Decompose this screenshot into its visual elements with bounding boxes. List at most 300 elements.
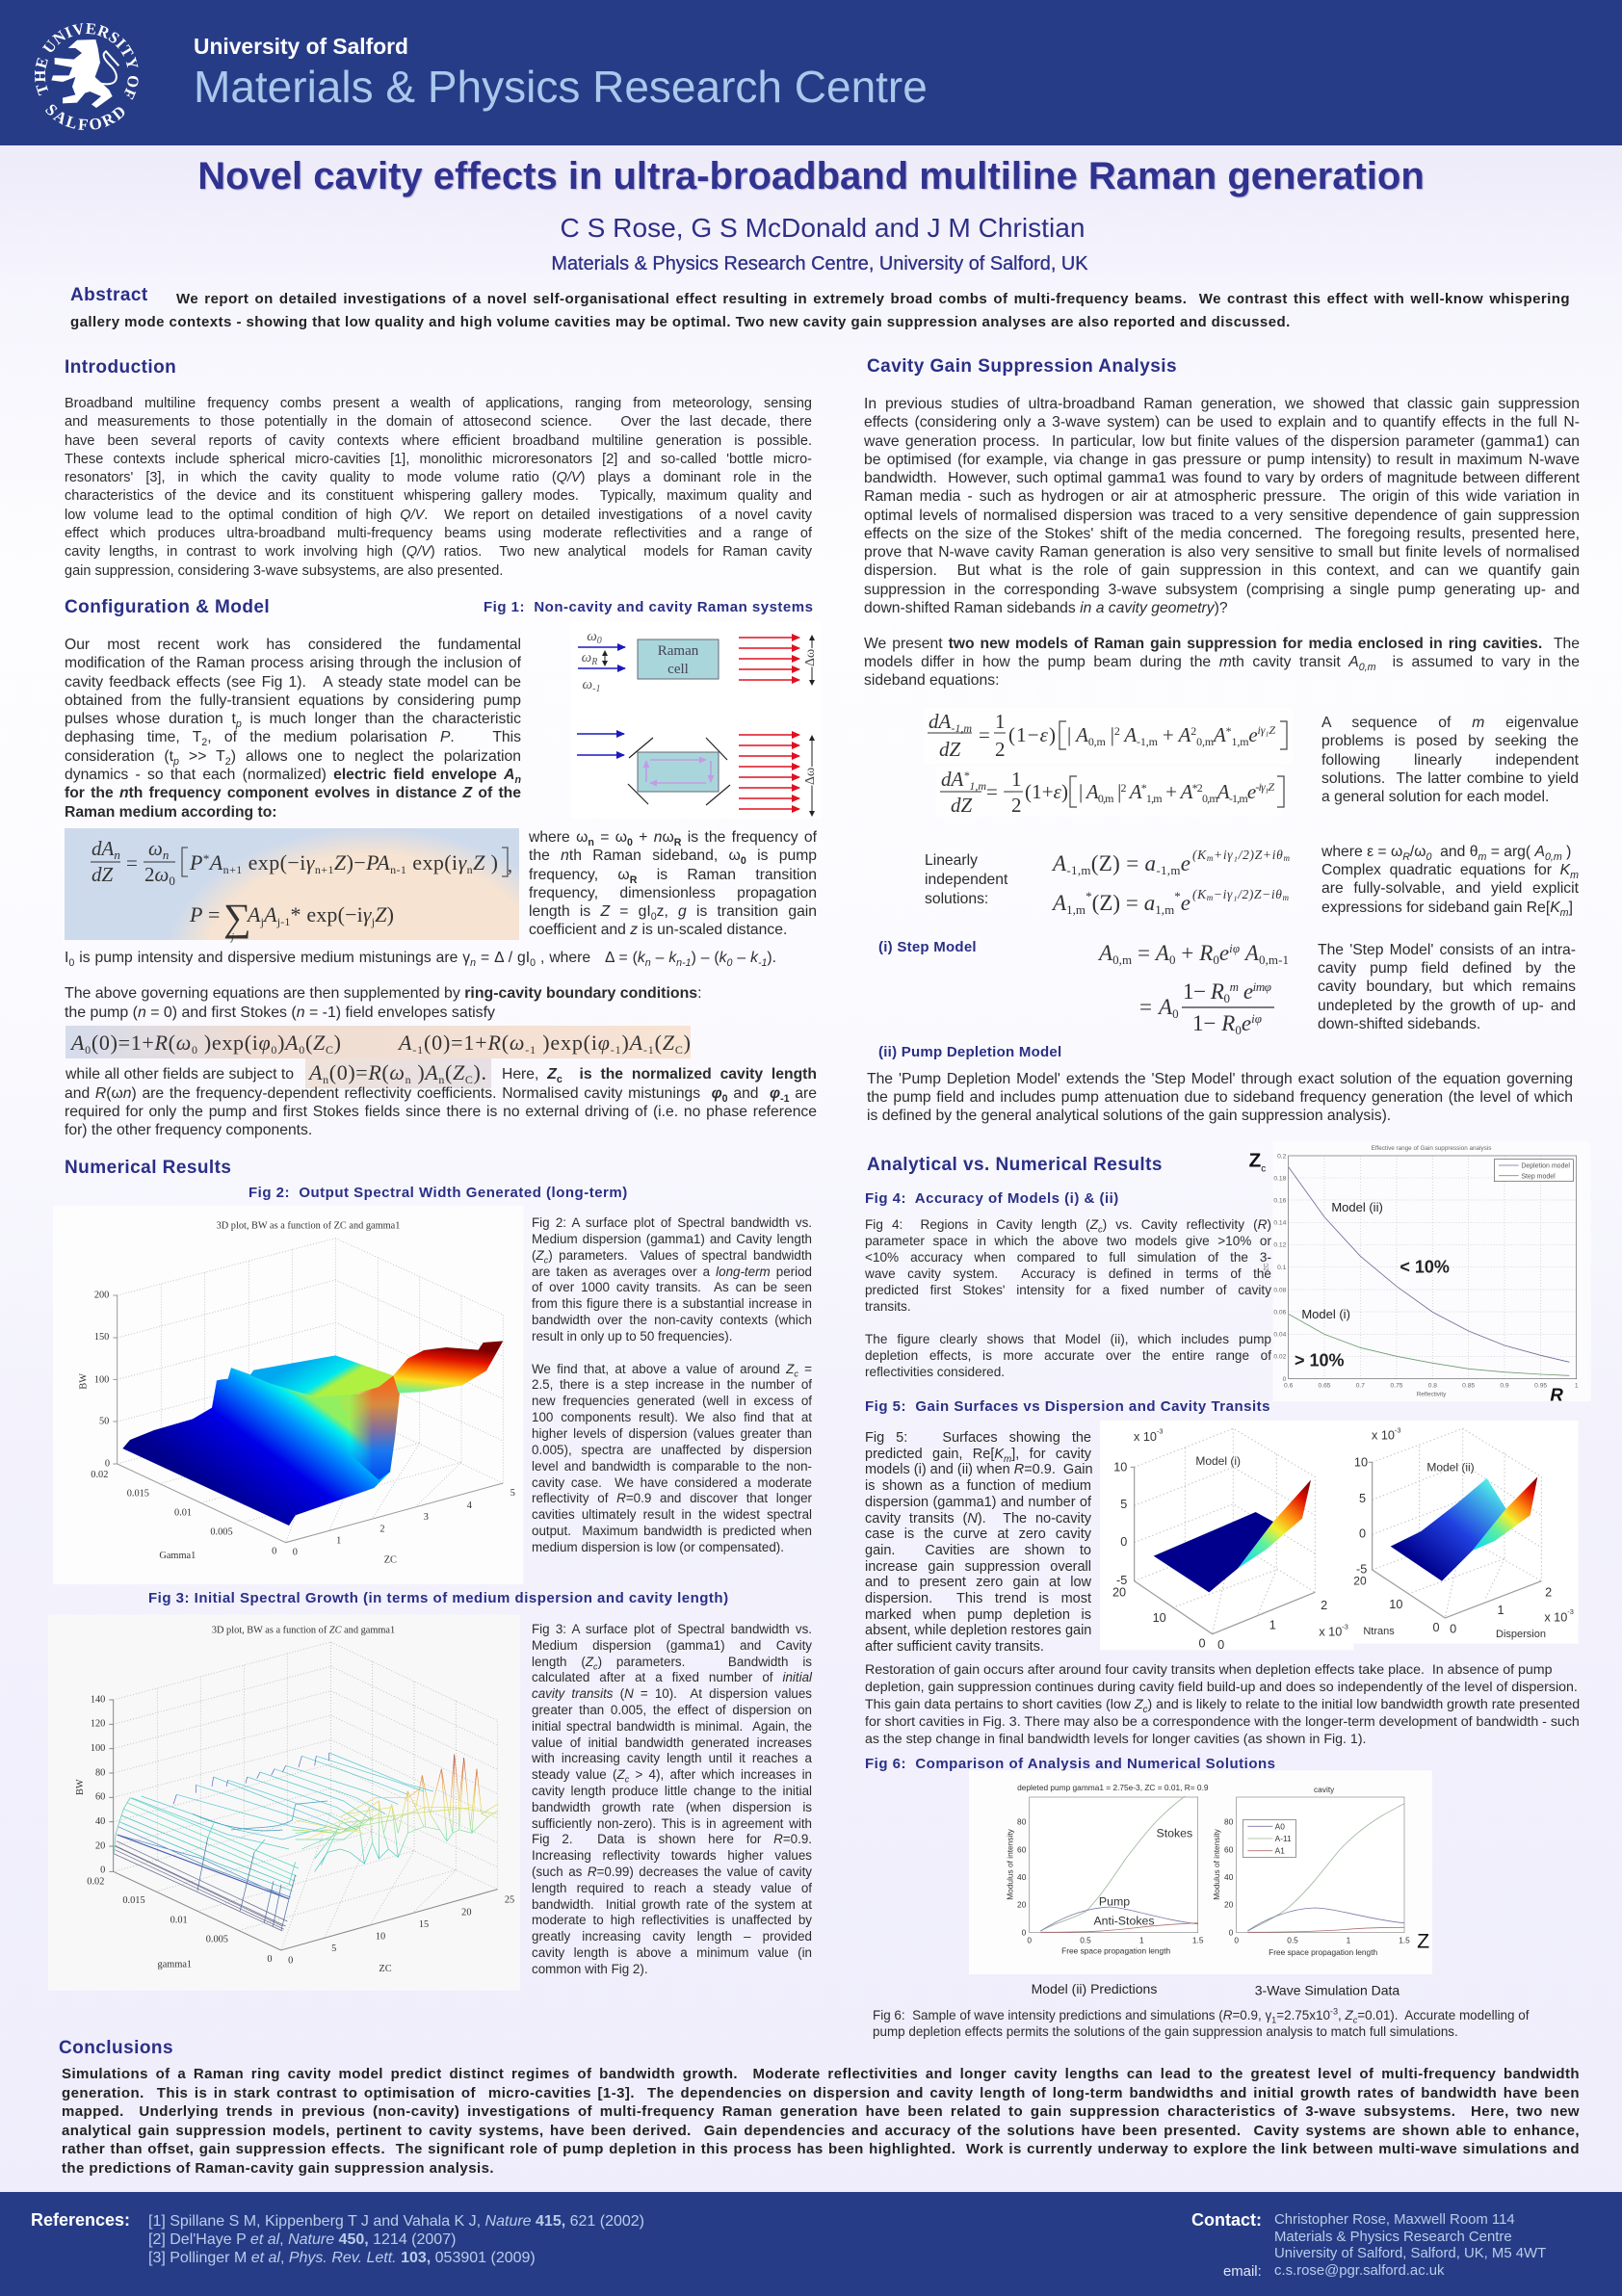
equation: step model: R <box>1198 941 1213 965</box>
equation: governing field equations: j <box>229 931 234 943</box>
text: figure 2 description: from this figure there is a substantial increase in <box>532 1296 812 1311</box>
text: figure 6 description: Fig 6: Sample of wave intensity predictions and simulations (R=0.9, γ1=2.75x10-3, Zc=0.01). Accurate modelling of <box>873 2007 1529 2025</box>
text: figure 2 description: Fig 2: A surface plot of Spectral bandwidth vs. <box>532 1215 812 1230</box>
heading: Configuration & Model: Configuration & Model <box>65 597 270 617</box>
surface plot: model (ii): 0 <box>1359 1527 1366 1541</box>
equation: linearly independent solutions: (K <box>1192 848 1206 862</box>
wireframe front sheets <box>114 1798 299 1931</box>
chart: figure 4 accuracy regions: 1 <box>1575 1382 1579 1389</box>
figure 2 axes <box>113 1295 503 1543</box>
text: restoration of gain: Restoration of gain occurs after around four cavity transits when depletion effects take place. In absence of pump <box>865 1662 1552 1678</box>
introduction text: gain suppression, considering 3-wave subsystems, are also presented. <box>65 563 503 579</box>
configuration text: for the nth frequency component evolves in distance Z of the <box>65 785 521 801</box>
equation: boundary conditions: C <box>326 1043 333 1057</box>
equation: sideband evolution: dA <box>941 768 963 791</box>
equation: sideband evolution: 1,m <box>1146 792 1163 805</box>
text: figure 4 description: predicted first Stokes' intensity for a fixed number of cavity <box>865 1283 1271 1297</box>
equation: linearly independent solutions: e <box>1181 891 1190 915</box>
upper non-cavity system: R <box>590 657 597 667</box>
text: figure 4 description: reflectivities considered. <box>865 1365 1005 1379</box>
chart: figure 2 surface plot <box>53 1221 523 1584</box>
curve: step model <box>1289 1314 1569 1375</box>
surface front <box>122 1368 401 1526</box>
plot: model (ii) predictions: 80 <box>1017 1817 1027 1827</box>
heading: Numerical Results: Numerical Results <box>65 1158 231 1178</box>
text: figure 4 description: parameter space in which the above two models give >10% or <box>865 1234 1271 1248</box>
text: left of inline equation: while all other fields are subject to <box>65 1066 294 1083</box>
equation: boundary conditions: n <box>406 1073 411 1086</box>
equation: boundary conditions: A <box>69 1031 85 1055</box>
surface plot: model (ii): 0 <box>1450 1622 1456 1635</box>
chart: figure 4 accuracy regions: 0.06 <box>1273 1309 1287 1316</box>
text: conclusions <box>62 2065 1580 2178</box>
equation: boundary conditions: -1 <box>412 1043 423 1057</box>
equation: sideband evolution: -1,m <box>1229 792 1248 805</box>
equation: sideband evolution: *2 <box>1192 781 1203 795</box>
introduction text: effect which produces ultra-broadband multi-frequency beams using moderate reflectivities and a range of <box>65 526 812 541</box>
equation: sideband evolution: 2 <box>1114 724 1120 738</box>
text: boundary conditions intro: The above governing equations are then supplemented by ring-cavity boundary conditions: <box>65 985 702 1002</box>
equation: step model: 1− R <box>1192 1011 1235 1035</box>
text: pump depletion description <box>867 1070 1573 1125</box>
equation: sideband evolution: (1+ε) <box>1025 780 1068 803</box>
equation: sideband evolution: * <box>1226 724 1232 738</box>
surface plot: model (i): 0 <box>1198 1637 1206 1651</box>
plot: 3-wave simulation data: A-11 <box>1275 1834 1292 1843</box>
text: figure 5 description: is shown as a function of medium <box>865 1478 1091 1494</box>
chart: figure 4 accuracy regions: 0.12 <box>1273 1242 1287 1249</box>
equation: boundary conditions: ) <box>277 1031 284 1055</box>
surface plot: model (ii): x 10 <box>1372 1429 1395 1443</box>
equation: governing field equations: )−PA <box>347 850 390 874</box>
plot: 3-wave simulation data: 40 <box>1224 1872 1234 1882</box>
text: restoration of gain: as the step change in final bandwidth levels for longer cavities (as shown in Fig. 1). <box>865 1732 1366 1747</box>
chart: figure 4 accuracy regions: 0.08 <box>1273 1287 1287 1293</box>
text: figure 2 description: of over 1000 cavity transits. As can be seen <box>532 1280 812 1294</box>
chart: figure 2 surface plot: 200 <box>94 1291 109 1301</box>
chart: figure 3 wireframe plot: 80 <box>95 1767 105 1778</box>
equation: governing field equations: γ <box>306 850 316 874</box>
equation: step model: 0 <box>1213 952 1219 967</box>
text: reflectivity and mistunings: and R(ωn) are the frequency-dependent reflectivity coefficients. Normalised cavity mistunings φ0 and φ-1 are <box>65 1085 817 1105</box>
equation: boundary conditions: 0 <box>85 1043 91 1057</box>
chart: figure 3 wireframe plot: gamma1 <box>158 1959 192 1970</box>
text: conclusions: analytical gain suppression models, pertinent to cavity systems, have been derived. Gain dependencies and accuracy of the solutions have been presented. Cavity systems are shown able to enhance, <box>62 2123 1580 2138</box>
text: pump intensity and mistunings: I0 is pump intensity and dispersive medium mistunings are γn = Δ / gI0 , where Δ = (kn – kn-1) – (k0 – k-1). <box>65 950 776 969</box>
configuration text: obtained from the fully-transient equations by considering pump <box>65 692 521 709</box>
introduction text: low volume lead to the optimal condition of high Q/V. We report on detailed investigations of a novel cavity <box>65 508 812 523</box>
equation: boundary conditions: (0)=1+ <box>92 1031 154 1055</box>
plot: 3-wave simulation data: 1.5 <box>1399 1935 1410 1944</box>
equation: governing field equations: n <box>467 863 473 876</box>
chart: figure 4 accuracy regions: 0.18 <box>1273 1175 1287 1182</box>
chart: figure 4 accuracy regions: 0.1 <box>1277 1265 1287 1271</box>
equation: step model: m <box>1230 979 1239 994</box>
figure 5 caption: Fig 5: Gain Surfaces vs Dispersion and Cavity Transits <box>865 1398 1270 1415</box>
equation: governing field equations: Z <box>334 850 347 874</box>
equation: step model: 0 <box>1235 1023 1242 1037</box>
text: eigenvalue problems: solutions. The latter combine to yield <box>1321 770 1579 787</box>
equation: sideband evolution: | <box>1106 723 1114 746</box>
surface plot: model (ii): Dispersion <box>1496 1629 1546 1640</box>
equation: step model <box>1097 941 1289 1037</box>
chart: figure 5 gain surfaces <box>1079 1416 1599 1666</box>
text: figure 5 description <box>865 1430 1091 1656</box>
text: figure 2 description: higher levels of dispersion (values greater than <box>532 1426 812 1441</box>
plot: model (ii) predictions: 0.5 <box>1080 1935 1091 1944</box>
plot: 3-wave simulation data: Z <box>1417 1930 1429 1953</box>
equation: governing field equations: n+1 <box>223 863 242 876</box>
surface plot: model (ii): 2 <box>1545 1585 1552 1599</box>
equation: sideband evolution: + <box>1158 723 1179 746</box>
text: conclusions: generation. This is in stark contrast to optimisation of micro-cavities [1-3]. The dependencies on dispersion and cavity length of long-term bandwidths and initial growth rates of bandwidth have been <box>62 2084 1580 2101</box>
equation: step model: A <box>1240 941 1260 965</box>
text: figure 5 description: case is the curve at zero cavity <box>865 1526 1091 1542</box>
references list: [3] Pollinger M et al, Phys. Rev. Lett. 103, 053901 (2009) <box>148 2250 536 2266</box>
surface plot: model (i): x 10 <box>1319 1626 1342 1639</box>
equation: sideband evolution: 2 <box>1190 724 1196 738</box>
heading: Introduction: Introduction <box>65 357 176 378</box>
equation: boundary conditions: Z <box>453 1060 465 1084</box>
chart: figure 3 wireframe plot: 120 <box>91 1719 105 1730</box>
surface plot: model (ii): Model (ii) <box>1426 1461 1475 1474</box>
equation: boundary conditions: ( <box>445 1060 452 1084</box>
text: linearly independent solutions label: solutions: <box>925 891 988 907</box>
surface plot: model (i): 10 <box>1113 1460 1127 1474</box>
text: step model description: undepleted by the growth of up- and <box>1318 998 1576 1014</box>
configuration text: modification of the Raman process arising through the inclusion of <box>65 655 521 671</box>
text: pump depletion description: the pump field and includes pump attenuation due to sideband frequency generation (the level of which <box>867 1089 1573 1106</box>
plot: 3-wave simulation data: 0.5 <box>1287 1935 1298 1944</box>
text: figure 2 description: level and bandwidth is comparable to the non- <box>532 1459 812 1474</box>
plot: model (ii) predictions: 1 <box>1139 1935 1144 1944</box>
icon: University of Salford crest <box>35 23 139 130</box>
upper non-cavity system: -1 <box>592 684 600 694</box>
equation: linearly independent solutions: e <box>1181 851 1190 875</box>
figure 3 axes <box>109 1700 498 1950</box>
equation: sideband evolution: (1−ε) <box>1008 723 1056 746</box>
text: figure 4 description: <10% accuracy when compared to full simulation of the 3- <box>865 1250 1271 1265</box>
equation: boundary conditions: A <box>283 1031 299 1055</box>
text: figure 5 description: models (i) and (ii) when R=0.9. Gain <box>865 1462 1093 1477</box>
text: figure 5 description: absent, while depletion restores gain <box>865 1623 1091 1638</box>
text: figure 2 description: reflectivity of R=0.9 and discover that longer <box>532 1491 812 1505</box>
equation: governing field equations <box>91 837 512 943</box>
surface plot: model (i): -3 <box>1157 1427 1163 1436</box>
text: figure 3 description: calculated after at a fixed number of initial <box>532 1670 812 1684</box>
text: where epsilon: Complex quadratic equations for Km <box>1321 862 1579 881</box>
equation: governing field equations: n <box>114 848 120 862</box>
equation: governing field equations: * <box>203 851 209 866</box>
equation: step model: A <box>1097 941 1113 965</box>
text: figure 3 description: Medium dispersion (gamma1) and Cavity <box>532 1638 812 1653</box>
plot: 3-wave simulation data: 60 <box>1224 1844 1234 1854</box>
plot: 3-wave simulation data <box>1212 1785 1429 1998</box>
surface plot: model (ii): -5 <box>1356 1562 1367 1576</box>
equation: sideband evolution <box>928 710 1291 1037</box>
text: conclusions: mapped. Underlying trends in previous (non-cavity) investigations of multi-frequency Raman generation have been related to gain suppression characteristics of 3-wave subsystems. Here, two new <box>62 2103 1580 2120</box>
equation: governing field equations: 0 <box>169 874 175 888</box>
plot: model (ii) predictions: depleted pump gamma1 = 2.75e-3, ZC = 0.01, R= 0.9 <box>1017 1783 1209 1792</box>
equation: sideband evolution: e <box>1248 723 1258 746</box>
equation: sideband evolution: A <box>1177 723 1191 746</box>
text: figure 3 description: bandwidth growth rate (when dispersion is <box>532 1800 812 1814</box>
equation: linearly independent solutions: * <box>1086 889 1092 903</box>
plot: 3-wave simulation data: Modulus of intensity <box>1212 1828 1221 1900</box>
equation: sideband evolution: 0,m <box>1196 735 1215 748</box>
chart: figure 4 accuracy regions: ZC <box>1263 1263 1269 1271</box>
references list: [2] Del'Haye P et al, Nature 450, 1214 (2007) <box>148 2231 456 2248</box>
equation: governing field equations: n+1 <box>315 863 333 876</box>
chart: figure 4 accuracy regions: 0.02 <box>1273 1354 1287 1361</box>
authors: C S Rose, G S McDonald and J M Christian <box>561 213 1085 243</box>
poster title: Novel cavity effects in ultra-broadband multiline Raman generation <box>197 155 1425 197</box>
chart: figure 2 surface plot: 0 <box>293 1548 298 1558</box>
equation: boundary conditions: 0 <box>299 1043 304 1057</box>
introduction text: cavity lengths, in contrast to work involving high (Q/V) ratios. Two new analytical models for Raman cavity <box>65 544 812 560</box>
text: cavity gain suppression background: bandwidth. However, such optimal gamma1 was found to vary by orders of magnitude between different <box>864 470 1580 486</box>
equation: sideband evolution: A <box>1126 780 1142 803</box>
equation: linearly independent solutions: m <box>1207 893 1214 902</box>
chart: figure 4 accuracy regions: Reflectivity <box>1417 1391 1447 1397</box>
text: figure 3 description: length (Zc) parameters. Bandwidth is <box>532 1655 812 1671</box>
text: figure 3 description: Fig 2. Data is shown here for R=0.9. <box>532 1832 812 1846</box>
surface yellow transition band <box>337 1387 379 1422</box>
equation: boundary conditions: (0)=1+ <box>424 1031 487 1055</box>
equation: governing field equations: A <box>262 902 277 926</box>
chart annotations: < 10% <box>1400 1257 1450 1276</box>
text: cavity gain suppression background: effects on the size of the Stokes' shift of the media concerned. The foregoing results, presented here, <box>864 526 1580 542</box>
heading: Conclusions: Conclusions <box>59 2038 173 2058</box>
equation: boundary conditions: A <box>423 1060 438 1084</box>
surface plot: model (ii): 10 <box>1354 1456 1368 1470</box>
equation: governing field equations: = <box>126 851 138 874</box>
equation: step model: 0,m-1 <box>1259 952 1289 967</box>
abstract text <box>70 291 1570 330</box>
equation: governing field equations: dA <box>92 837 114 860</box>
equation: sideband evolution: A <box>1212 723 1226 746</box>
chart: figure 2 surface plot: 0 <box>105 1458 110 1469</box>
text: boundary conditions intro <box>65 985 702 1021</box>
plot: model (ii) predictions: Modulus of intensity <box>1005 1828 1014 1900</box>
chart: figure 2 surface plot: 0.005 <box>210 1526 233 1537</box>
research centre name: Materials & Physics Research Centre <box>194 62 928 112</box>
plot: model (ii) predictions: Free space propagation length <box>1061 1946 1171 1956</box>
plot: model (ii) predictions: 20 <box>1017 1900 1027 1910</box>
text: figure 2 description: cavities ultimately result in the widest spectral <box>532 1507 812 1522</box>
upper non-cavity system: ω <box>582 650 591 665</box>
text: linearly independent solutions label: Linearly <box>925 852 978 869</box>
equation: boundary conditions: R(ω <box>155 1031 191 1055</box>
text: figure 5 description: cavity transits (N). The no-cavity <box>865 1511 1091 1526</box>
text: figure 2 description: 2.5, there is a step increase in the number of <box>532 1377 812 1392</box>
chart: figure 2 surface plot: 0 <box>272 1547 276 1557</box>
text: linearly independent solutions label: independent <box>925 872 1007 888</box>
text: figure 5 description: and to present zero gain at low <box>865 1575 1091 1590</box>
chart: figure 4 accuracy regions: 0.16 <box>1273 1197 1287 1204</box>
text: linearly independent solutions label <box>925 852 1007 907</box>
abstract <box>70 285 1570 330</box>
chart: figure 3 wireframe plot: 3D plot, BW as a function of ZC and gamma1 <box>212 1625 395 1635</box>
plot: model (ii) predictions: Pump <box>1099 1894 1130 1908</box>
references list: [1] Spillane S M, Kippenberg T J and Vahala K J, Nature 415, 621 (2002) <box>148 2213 644 2230</box>
surface plateau <box>231 1355 393 1397</box>
surface plot: model (i): 20 <box>1112 1585 1126 1599</box>
introduction text: These contexts include spherical micro-cavities [1], monolithic microresonators [2] and so-called 'bottle micro- <box>65 452 812 467</box>
surface step wall <box>352 1375 400 1479</box>
text: figure 2 description: Medium dispersion (gamma1) and Cavity length <box>532 1232 812 1246</box>
text: where epsilon: expressions for sideband gain Re[Km] <box>1321 900 1573 919</box>
heading: Cavity Gain Suppression Analysis: Cavity Gain Suppression Analysis <box>867 356 1177 377</box>
text: step model description: The 'Step Model' consists of an intra- <box>1318 942 1576 958</box>
text: conclusions: rather than offset, gain suppression effects. The significant role of pump depletion in this process has been highlighted. Work is currently underway to explore the link between multi-wave simulations and <box>62 2141 1580 2157</box>
chart: figure 4 accuracy regions: 0 <box>1283 1376 1287 1383</box>
surface plot: model (i): 2 <box>1321 1599 1327 1612</box>
lower ring-cavity system <box>577 734 818 816</box>
text: step model description <box>1318 941 1576 1033</box>
equation: sideband evolution: dZ <box>951 794 973 817</box>
text: cavity gain suppression background: dispersion. But what is the role of gain suppression in this context, and can we quantify gain <box>864 562 1580 579</box>
surface plot: model (i) <box>1112 1427 1348 1652</box>
surface plot: model (i): x 10 <box>1134 1430 1157 1444</box>
text: figure 3 description: Increasing reflectivity towards higher values <box>532 1848 812 1863</box>
chart: figure 6 intensity plots <box>944 1762 1464 2013</box>
plot: model (ii) predictions: 0 <box>1022 1927 1027 1937</box>
chart: figure 4 accuracy regions: 0.75 <box>1391 1382 1403 1389</box>
introduction text: Broadband multiline frequency combs present a wealth of applications, ranging from meteorology, sensing <box>65 396 812 411</box>
icon: University of Salford crest: THE UNIVERSITY OF <box>35 23 139 100</box>
equation: governing field equations: P = <box>189 902 220 926</box>
text: definitions beside equations: where ωn = ω0 + nωR is the frequency of <box>529 829 817 848</box>
chart: figure 4 accuracy regions: 0.8 <box>1428 1382 1437 1389</box>
text: figure 3 description: moderate to high reflectivities is unaffected by <box>532 1913 812 1927</box>
equation: governing field equations: γ <box>363 902 373 926</box>
surface plot: model (i): -3 <box>1342 1622 1348 1631</box>
equation: boundary conditions: ) <box>684 1031 691 1055</box>
text: figure 5 description: after sufficient cavity transits. <box>865 1639 1044 1655</box>
legend: Step model <box>1521 1173 1556 1180</box>
equation: boundary conditions: n <box>438 1073 444 1086</box>
chart: figure 3 wireframe plot: 20 <box>461 1908 471 1918</box>
chart: figure 3 wireframe plot: 25 <box>505 1895 514 1906</box>
equation: sideband evolution: | <box>1113 780 1121 803</box>
equation: step model: = <box>1139 995 1152 1019</box>
text: cavity gain suppression background: In previous studies of ultra-broadband Raman generation, we showed that classic gain suppression <box>864 396 1580 412</box>
text: definitions beside equations: the nth Raman sideband, ω0 is pump <box>529 848 817 867</box>
text: figure 3 description: cavity transits (N = 10). At dispersion values <box>532 1686 812 1701</box>
equation: boundary conditions: -1 <box>643 1043 654 1057</box>
text: figure 2 description: are taken as averages over a long-term period <box>532 1265 812 1279</box>
surface plot: model (i): 5 <box>1120 1498 1127 1511</box>
text: cavity gain suppression background: suppression in the corresponding 3-wave subsystem (comprising a single pump generating up- and <box>864 582 1580 597</box>
introduction text: resonators' [3], in which the cavity quality to mode volume ratio (Q/V) plays a dominant role in the <box>65 470 812 485</box>
text: figure 2 description: output. Maximum bandwidth is predicted when <box>532 1524 812 1538</box>
text: figure 2 description: We find that, at above a value of around Zc = <box>532 1362 812 1378</box>
text: figure 5 description: Fig 5: Surfaces showing the <box>865 1430 1091 1446</box>
chart: figure 2 surface plot: 1 <box>336 1536 341 1547</box>
plot: 3-wave simulation data: cavity <box>1314 1785 1335 1794</box>
equation: sideband evolution: e <box>1247 780 1256 803</box>
upper non-cavity system: cell <box>667 662 689 677</box>
equation: boundary conditions: Z <box>663 1031 675 1055</box>
chart: figure 2 surface plot: 3 <box>424 1512 429 1523</box>
plot: 3-wave simulation data: 20 <box>1224 1900 1234 1910</box>
lower ring-cavity system: Δω <box>803 768 818 785</box>
surface plot: model (i): 10 <box>1153 1611 1166 1625</box>
plot: model (ii) predictions: Model (ii) Predictions <box>1032 1981 1157 1996</box>
contact details: c.s.rose@pgr.salford.ac.uk <box>1274 2263 1445 2279</box>
equation: boundary conditions: φ <box>259 1031 271 1055</box>
surface plot: model (ii): Ntrans <box>1363 1626 1395 1637</box>
equation: governing field equations: A <box>208 850 223 874</box>
configuration text: dephasing time, T2, of the medium polarisation P. This <box>65 729 521 749</box>
equation: linearly independent solutions: A <box>1051 891 1067 915</box>
text: eigenvalue problems: problems is posed by seeking the <box>1321 733 1579 749</box>
chart: figure 4 accuracy regions: 0.7 <box>1356 1382 1365 1389</box>
equation: step model: iφ <box>1251 1011 1262 1026</box>
text: figure 3 description: cavity length is above a minimum value (in <box>532 1945 812 1960</box>
configuration text: Raman medium according to: <box>65 804 277 821</box>
text: eigenvalue problems <box>1321 715 1579 805</box>
text: definitions beside equations <box>529 829 817 938</box>
references list <box>148 2213 644 2267</box>
upper non-cavity system: ω <box>583 677 592 692</box>
chart: figure 4 accuracy regions: 0.85 <box>1462 1382 1475 1389</box>
equation: boundary conditions: A <box>307 1060 323 1084</box>
text: figure 4 description <box>865 1216 1271 1380</box>
plot: model (ii) predictions: 0 <box>1027 1935 1032 1944</box>
equation: sideband evolution: + <box>1162 780 1181 803</box>
equation: governing field equations: n-1 <box>390 863 406 876</box>
text: restoration of gain: This gain data pertains to short cavities (low Zc) and is likely to relate to the initial low bandwidth growth rate presented <box>865 1697 1580 1715</box>
equation: step model: e <box>1239 979 1253 1004</box>
plot: 3-wave simulation data: 80 <box>1224 1817 1234 1827</box>
plot: 3-wave simulation data: 0 <box>1234 1935 1239 1944</box>
plot: 3-wave simulation data: 3-Wave Simulation Data <box>1255 1983 1400 1998</box>
upper non-cavity system: Δω <box>803 649 818 666</box>
equation: boundary conditions: A <box>628 1031 643 1055</box>
equation: sideband evolution: 0,m <box>1202 792 1218 805</box>
chart: figure 4 accuracy regions: 0.9 <box>1500 1382 1509 1389</box>
text: cavity gain suppression background <box>864 396 1580 616</box>
text: where epsilon: are fully-solvable, and yield explicit <box>1321 880 1579 897</box>
equation: boundary conditions: 0 <box>271 1043 276 1057</box>
text: figure 2 description: new frequencies generated (well in excess of <box>532 1394 812 1408</box>
equation: sideband evolution: 2 <box>1120 781 1126 795</box>
chart: figure 2 surface plot: ZC <box>384 1555 397 1566</box>
chart: figure 2 surface plot: Gamma1 <box>159 1551 196 1561</box>
text: definitions beside equations: frequency, ωR is Raman transition <box>529 867 817 886</box>
text: cavity gain suppression background: wave generation process. In particular, low but finite values of the dispersion parameter (gamma1) can <box>864 433 1580 449</box>
chart annotations: Model (ii) <box>1331 1200 1383 1214</box>
text: two new models <box>864 636 1580 689</box>
text: figure 3 description: value of initial bandwidth generated increases <box>532 1735 812 1750</box>
chart: figure 4 accuracy regions: 0.2 <box>1277 1153 1287 1160</box>
text: step model description: cavity pump field defined by the <box>1318 960 1576 977</box>
equation: boundary conditions: Z <box>313 1031 326 1055</box>
text: figure 2 description: result in only up to 50 frequencies). <box>532 1329 732 1344</box>
legend <box>1494 1160 1573 1182</box>
text: restoration of gain: for short cavities in Fig. 3. There may also be a correspondence with the longer-term development of bandwidth - such <box>865 1714 1580 1730</box>
heading: step model: (i) Step Model <box>878 939 977 955</box>
text: figure 5 description: dispersion (gamma1) and number of <box>865 1495 1091 1510</box>
chart: figure 3 wireframe plot: 15 <box>419 1919 429 1930</box>
equation: boundary conditions: ) <box>411 1060 425 1084</box>
text: figure 3 description: initial spectral bandwidth is minimal. Again, the <box>532 1719 812 1734</box>
figure 2 caption: Fig 2: Output Spectral Width Generated (long-term) <box>249 1185 628 1201</box>
text: figure 3 description: (such as R=0.99) decreases the value of cavity <box>532 1865 812 1879</box>
boundary condition equation strip background <box>65 1026 691 1058</box>
